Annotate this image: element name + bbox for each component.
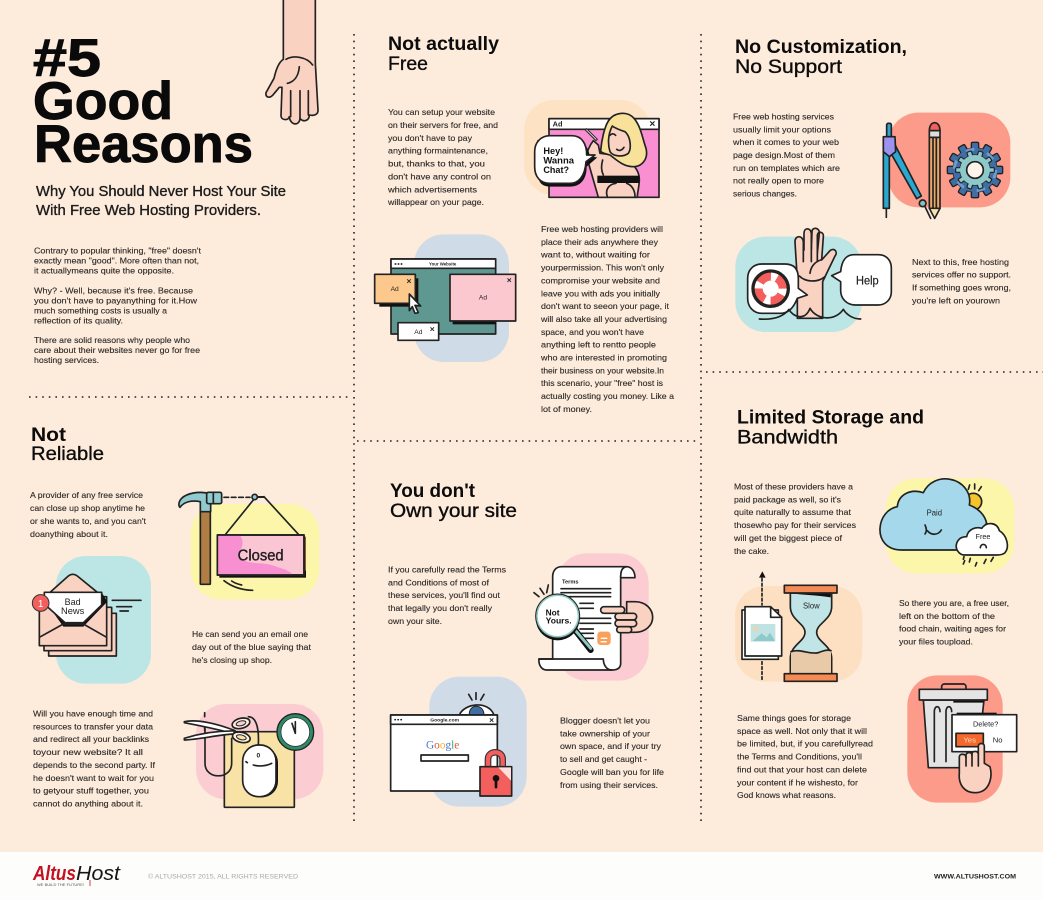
- text: transfer your data: toyour new website? It all: [33, 747, 143, 757]
- intro text: you don't have to payanything for it.How: [34, 296, 198, 306]
- text: ads anywhere: their business on your website.In: [541, 365, 664, 375]
- text: no support: If something goes wrong,: [912, 282, 1011, 292]
- text: ads anywhere: leave you with ads you initially: [541, 288, 661, 298]
- text: no support: [912, 257, 1011, 305]
- text: any free service: can close up shop anytime he: [30, 503, 145, 513]
- main title: Good: [33, 72, 173, 131]
- icon: paid and free clouds: Paid: [927, 509, 942, 518]
- icon: hanging hand: [266, 0, 318, 124]
- text: closing up shop: day out of the blue saying that: [192, 642, 312, 652]
- heading: Free: [388, 53, 428, 75]
- text: limited options: [732, 112, 840, 199]
- text: ads anywhere: yourpermission. This won't only: [541, 263, 665, 273]
- icon: ad popup with speech bubble: Wanna: [543, 156, 575, 166]
- icon: ad popup with speech bubble: [524, 100, 659, 197]
- heading: Bandwidth: [737, 426, 838, 448]
- text: no support: you're left on yourown: [912, 295, 1000, 305]
- text: storage space: find out that your host can delete: [737, 764, 867, 774]
- heading: Own your site: [390, 500, 517, 522]
- panel: limited storage and bandwidth: [733, 406, 1017, 803]
- icon: hammer and closed sign: Closed: [238, 548, 284, 565]
- heading: Not actually: [388, 33, 499, 55]
- icon: website covered in ads: Your Website: [429, 261, 457, 266]
- intro text: There are solid reasons why people who: [34, 335, 190, 345]
- icon: bad news envelope: 1: [38, 599, 44, 610]
- icon: terms document and magnifier: Yours.: [546, 615, 572, 625]
- intro text: exactly mean "good". More often than not,: [34, 256, 199, 266]
- icon: trash can with delete dialog: No: [993, 736, 1003, 745]
- text: setup for free: don't have any control on: [388, 172, 491, 182]
- text: closing up shop: he's closing up shop.: [192, 655, 272, 665]
- text: ads anywhere: compromise your website and: [541, 275, 660, 285]
- main title: Reasons: [34, 115, 253, 174]
- logo: Altus: [32, 863, 76, 885]
- icon: terms document and magnifier: Terms: [562, 580, 579, 586]
- logo: Host: [76, 863, 122, 885]
- text: terms and conditions: these services, you'll find out: [388, 590, 501, 600]
- text: setup for free: on their servers for free, and: [388, 120, 498, 130]
- text: transfer your data: cannot do anything about it.: [33, 798, 143, 808]
- text: no support: Next to this, free hosting: [912, 257, 1009, 267]
- text: setup for free: which advertisements: [387, 184, 477, 194]
- intro text: care about their websites never go for free: [34, 345, 200, 355]
- text: setup for free: [387, 107, 498, 207]
- text: ads anywhere: this scenario, your "free" host is: [541, 378, 663, 388]
- icon: compass, pencil and gear: [883, 113, 1010, 218]
- text: transfer your data: depends to the second party. If: [33, 760, 156, 770]
- icon: website covered in ads: Ad: [479, 294, 487, 301]
- text: storage space: the Terms and Conditions, you'll: [737, 752, 862, 762]
- icon: scissors, mouse and clock: 0: [256, 752, 260, 759]
- text: ads anywhere: [540, 224, 674, 414]
- copyright: © ALTUSHOST 2015, ALL RIGHTS RESERVED: [148, 872, 298, 880]
- text: any free service: or she wants to, and you can't: [30, 516, 147, 526]
- icon: hammer and closed sign: [179, 492, 319, 599]
- text: blogger: [560, 716, 664, 790]
- text: storage space: be limited, but, if you carefullyread: [737, 739, 873, 749]
- text: ads anywhere: place their ads anywhere they: [541, 237, 659, 247]
- website url: WWW.ALTUSHOST.COM: [934, 874, 1016, 880]
- text: blogger: Google will ban you for life: [560, 767, 664, 777]
- icon: google window, eye and padlock: ✕: [489, 717, 495, 724]
- icon: website covered in ads: ✕: [430, 326, 436, 333]
- text: setup for free: willappear on your page.: [387, 197, 484, 207]
- icon: google window, eye and padlock: [391, 677, 527, 807]
- text: limited options: Free web hosting services: [733, 112, 834, 122]
- intro text: much something costs is usually a: [34, 306, 167, 316]
- icon: drowning hand calling for help: [735, 228, 891, 332]
- text: blogger: own space, and if your try: [560, 741, 662, 751]
- icon: website covered in ads: Ad: [414, 329, 423, 336]
- icon: ad popup with speech bubble: ✕: [649, 120, 656, 129]
- icon: trash can with delete dialog: [907, 675, 1017, 803]
- text: terms and conditions: that legally you don't really: [388, 603, 493, 613]
- text: limited options: when it comes to your web: [732, 137, 839, 147]
- text: blogger: take ownership of your: [560, 728, 650, 738]
- icon: terms document and magnifier: Not: [546, 607, 560, 617]
- text: transfer your data: Will you have enough time and: [33, 708, 153, 718]
- icon: paid and free clouds: Free: [975, 532, 990, 541]
- text: food chain: [899, 598, 1009, 647]
- heading: [388, 33, 499, 75]
- icon: paid and free clouds: [880, 478, 1014, 573]
- text: ads anywhere: Free web hosting providers will: [541, 224, 663, 234]
- text: limited options: serious changes.: [733, 189, 797, 199]
- main title: [33, 29, 253, 174]
- intro text: hosting services.: [34, 355, 99, 365]
- logo: WE BUILD THE FUTURE!: [37, 883, 84, 887]
- icon: ad popup with speech bubble: Ad: [553, 120, 562, 129]
- panel: no customization: [732, 36, 1011, 332]
- subtitle: With Free Web Hosting Providers.: [36, 202, 261, 219]
- text: storage space: God knows what reasons.: [737, 790, 836, 800]
- heading: No Support: [735, 56, 843, 78]
- icon: website covered in ads: ✕: [507, 278, 513, 285]
- text: terms and conditions: If you carefully read the Terms: [388, 564, 506, 574]
- icon: trash can with delete dialog: Yes: [963, 736, 976, 745]
- main title: #5: [33, 29, 101, 88]
- panel: you don't own your site: [388, 480, 664, 807]
- icon: website covered in ads: [375, 234, 516, 362]
- text: terms and conditions: [388, 564, 506, 626]
- icon: bad news envelope: [32, 556, 151, 684]
- icon: website covered in ads: Ad: [391, 286, 399, 293]
- logo: [32, 863, 122, 887]
- panel: not actually free: [375, 33, 674, 414]
- icon: scissors, mouse and clock: [184, 704, 323, 807]
- icon: hourglass and upload file: [735, 571, 862, 682]
- intro text: [34, 246, 202, 365]
- intro text: Contrary to popular thinking, "free" doesn't: [34, 246, 202, 256]
- text: terms and conditions: own your site.: [388, 616, 442, 626]
- text: ads anywhere: will also take all your advertising: [540, 314, 667, 324]
- text: ads anywhere: actually costing you money. Like a: [541, 391, 674, 401]
- footer: [0, 852, 1043, 900]
- text: transfer your data: resources to transfer your data: [33, 721, 153, 731]
- text: terms and conditions: and Conditions of most of: [388, 577, 490, 587]
- text: paid package: [733, 482, 856, 556]
- text: limited options: page design.Most of them: [733, 150, 835, 160]
- text: ads anywhere: who are interested in promoting: [540, 352, 667, 362]
- heading: No Customization,: [735, 36, 907, 58]
- text: blogger: Blogger doesn't let you: [560, 716, 650, 726]
- icon: bad news envelope: Bad: [65, 597, 81, 607]
- text: ads anywhere: anything left to rentto people: [541, 340, 656, 350]
- text: food chain: your files toupload.: [899, 637, 973, 647]
- text: transfer your data: and redirect all your backlinks: [33, 734, 149, 744]
- text: setup for free: You can setup your website: [388, 107, 495, 117]
- text: storage space: space as well. Not only that it will: [737, 726, 867, 736]
- text: closing up shop: [192, 629, 312, 665]
- icon: google window, eye and padlock: Google: [426, 737, 459, 751]
- icon: trash can with delete dialog: Delete?: [973, 720, 998, 729]
- icon: drowning hand calling for help: Help: [856, 273, 879, 287]
- heading: Not: [31, 424, 67, 446]
- text: ads anywhere: lot of money.: [541, 404, 592, 414]
- text: blogger: to sell and get caught -: [560, 754, 647, 764]
- text: storage space: [737, 713, 873, 800]
- icon: ad popup with speech bubble: Hey!: [543, 146, 563, 156]
- text: paid package: thosewho pay for their services: [734, 520, 856, 530]
- text: ads anywhere: want to, without waiting for: [540, 250, 650, 260]
- subtitle: [36, 183, 286, 219]
- text: limited options: usually limit your options: [733, 124, 831, 134]
- text: paid package: paid package as well, so it's: [734, 494, 841, 504]
- icon: ad popup with speech bubble: Chat?: [543, 165, 569, 175]
- text: any free service: [30, 490, 147, 539]
- text: food chain: food chain, waiting ages for: [899, 624, 1006, 634]
- icon: google window, eye and padlock: Google.com: [430, 718, 460, 724]
- subtitle: Why You Should Never Host Your Site: [36, 183, 286, 200]
- panel: intro: [33, 0, 318, 365]
- text: storage space: your content if he wishesto, for: [737, 777, 858, 787]
- text: ads anywhere: space, and you won't have: [541, 327, 644, 337]
- text: limited options: not really open to more: [733, 176, 824, 186]
- icon: terms document and magnifier: [534, 553, 653, 681]
- intro text: Why? - Well, because it's free. Because: [34, 286, 193, 296]
- text: ads anywhere: don't want to seeon your page, it: [541, 301, 670, 311]
- text: any free service: A provider of any free service: [30, 490, 143, 500]
- text: setup for free: you don't have to pay: [388, 133, 473, 143]
- heading: [31, 424, 104, 465]
- text: closing up shop: He can send you an email one: [192, 629, 308, 639]
- text: food chain: left on the bottom of the: [899, 611, 995, 621]
- intro text: reflection of its quality.: [34, 316, 123, 326]
- text: paid package: the cake.: [734, 546, 769, 556]
- text: no support: services offer no support.: [912, 270, 1011, 280]
- text: storage space: Same things goes for storage: [737, 713, 851, 723]
- text: paid package: quite naturally to assume that: [734, 507, 852, 517]
- panel: not reliable: [30, 424, 323, 808]
- heading: Reliable: [31, 443, 104, 465]
- icon: bad news envelope: News: [61, 606, 85, 616]
- text: transfer your data: he doesn't want to wait for you: [33, 773, 154, 783]
- heading: You don't: [390, 480, 475, 502]
- text: setup for free: anything formaintenance,: [388, 146, 488, 156]
- text: blogger: from using their services.: [560, 780, 658, 790]
- text: food chain: So there you are, a free user,: [899, 598, 1009, 608]
- text: any free service: doanything about it.: [30, 529, 108, 539]
- heading: [735, 36, 907, 78]
- heading: Limited Storage and: [737, 406, 924, 428]
- icon: hourglass and upload file: Slow: [803, 602, 820, 611]
- text: transfer your data: [33, 708, 156, 808]
- intro text: it actuallymeans quite the opposite.: [34, 266, 174, 276]
- text: transfer your data: to getyour stuff together, you: [33, 786, 149, 796]
- heading: [390, 480, 517, 522]
- text: setup for free: but, thanks to that, you: [388, 159, 485, 169]
- text: paid package: will get the biggest piece of: [733, 533, 843, 543]
- text: paid package: Most of these providers have a: [734, 482, 853, 492]
- text: limited options: run on templates which are: [733, 163, 840, 173]
- heading: [737, 406, 924, 448]
- icon: website covered in ads: ✕: [406, 278, 412, 285]
